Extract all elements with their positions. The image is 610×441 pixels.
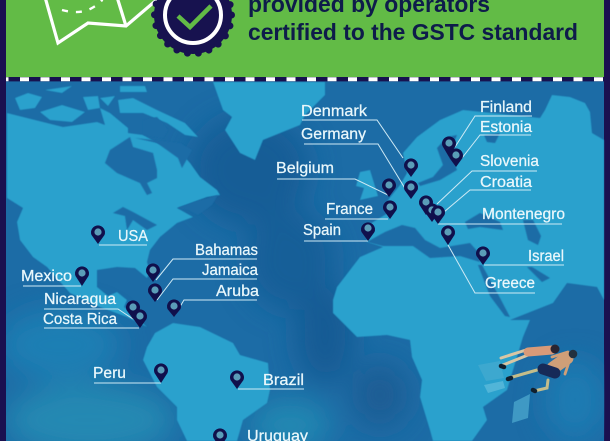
land masses (7, 82, 604, 441)
marker: France (325, 200, 397, 219)
marker: Germany (301, 126, 418, 199)
marker: Slovenia (419, 153, 539, 215)
marker: Israel (476, 246, 564, 265)
marker: Mexico: Mexico (21, 268, 72, 285)
marker: Germany: Germany (301, 126, 366, 143)
marker: Aruba: Aruba (216, 283, 259, 300)
Caspian Sea (523, 220, 541, 245)
marker: Jamaica: Jamaica (202, 262, 258, 279)
marker: Israel: Israel (528, 248, 564, 265)
marker: Nicaragua: Nicaragua (44, 291, 116, 308)
marker: Peru (93, 363, 168, 383)
image: snorkelers (478, 344, 577, 423)
marker: Denmark (301, 103, 418, 177)
heading: title text: certified to the GSTC standard (248, 19, 578, 45)
marker: Nicaragua (44, 291, 140, 319)
marker: Costa Rica (43, 309, 147, 328)
marker: Peru: Peru (93, 365, 126, 382)
divider: dashed band (0, 77, 604, 81)
marker: Bahamas: Bahamas (195, 242, 258, 259)
marker: Brazil (230, 370, 304, 389)
marker: Jamaica (148, 262, 258, 302)
marker: Estonia: Estonia (480, 119, 532, 136)
marker: Bahamas (146, 242, 258, 282)
Great Lakes (113, 207, 157, 230)
White Sea (484, 133, 500, 143)
marker: Croatia (425, 174, 532, 222)
icon: folded map (45, 0, 160, 43)
marker: Aruba (167, 283, 259, 317)
heading: title text (248, 0, 578, 45)
British Isles (356, 170, 378, 200)
Hudson Bay (105, 137, 157, 195)
Greenland (213, 82, 325, 160)
marker: Uruguay (213, 428, 308, 441)
marker: Greece (441, 225, 535, 293)
Arctic islands (15, 93, 42, 110)
marker: Belgium: Belgium (276, 160, 334, 177)
icon: certified badge with check (154, 0, 232, 54)
marker: USA (91, 225, 149, 245)
Red Sea (478, 265, 510, 317)
Mediterranean (367, 225, 480, 262)
Black Sea (465, 213, 503, 230)
panel: green header (6, 0, 604, 78)
Baltic Sea (418, 135, 457, 186)
marker: Montenegro: Montenegro (482, 206, 565, 223)
marker: Spain: Spain (303, 222, 341, 239)
marker: Spain (303, 222, 375, 241)
marker: Finland: Finland (480, 99, 532, 116)
marker: Croatia: Croatia (480, 174, 532, 191)
marker: Mexico (21, 266, 89, 286)
marker: Greece: Greece (485, 275, 535, 292)
marker: Finland (442, 99, 532, 157)
marker: Slovenia: Slovenia (480, 153, 539, 170)
Europe, Africa, Asia (333, 95, 604, 441)
Persian Gulf (527, 267, 550, 282)
marker: France: France (326, 201, 373, 218)
North and Central America (7, 108, 220, 327)
inland seas and bays (105, 117, 550, 317)
marker: Estonia (449, 119, 532, 167)
marker: Denmark: Denmark (301, 103, 367, 120)
marker: USA: USA (118, 228, 149, 245)
South America (143, 323, 270, 441)
marker: Montenegro (431, 205, 565, 224)
Gulf of St Lawrence (177, 195, 218, 215)
marker: Costa Rica: Costa Rica (43, 311, 117, 328)
marker: Belgium (276, 160, 396, 197)
marker: Brazil: Brazil (263, 372, 304, 389)
